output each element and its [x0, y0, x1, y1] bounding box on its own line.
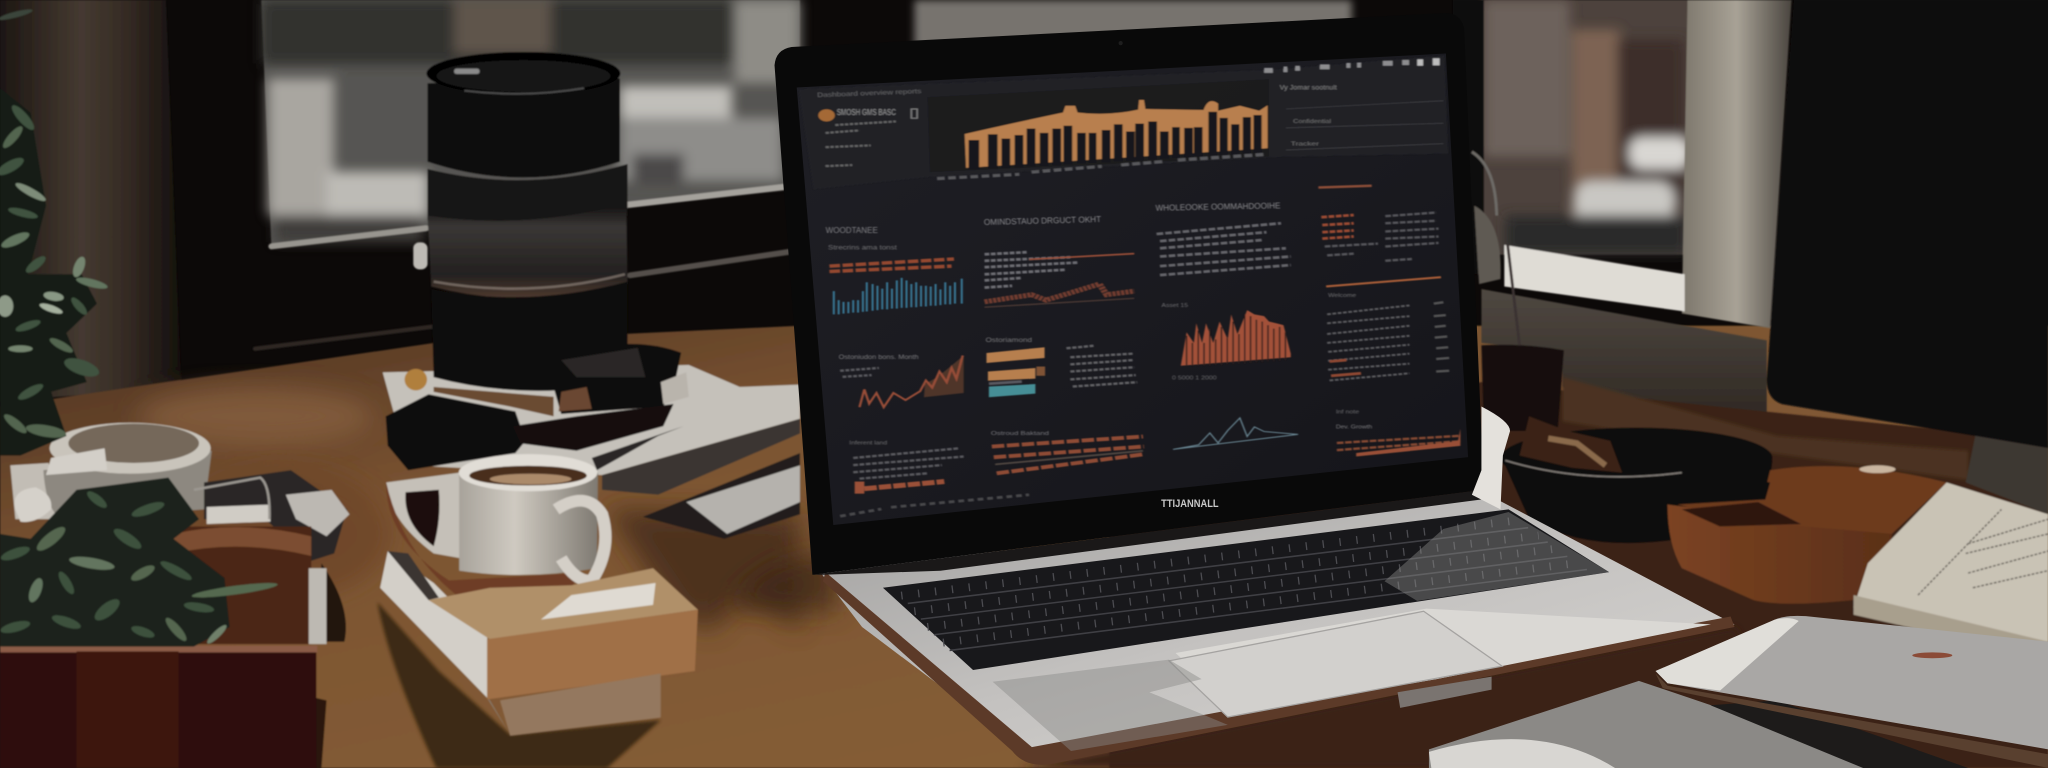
lower right chart: Inf note — [1336, 410, 1360, 415]
laptop brand logo: TTIJANNALL — [1161, 498, 1219, 510]
laptop shadow on the table — [1019, 627, 1750, 768]
lower right chart — [1336, 410, 1460, 457]
cast shadow under book stack — [378, 602, 661, 768]
section heading: left: WOODTANEE — [826, 226, 878, 235]
laptop base — [820, 494, 1735, 765]
right header panel text: Tracker — [1291, 142, 1320, 147]
section heading: right: WHOLEOOKE OOMMAHDOOIHE — [1155, 202, 1281, 213]
front edge — [823, 572, 1735, 765]
red column chart: 0 5000 1 2000 — [1172, 375, 1217, 381]
red column chart — [1161, 303, 1291, 381]
papers under grinder — [383, 365, 800, 539]
lower left text and bar: Inferent land — [849, 441, 888, 446]
lower centre table: Ostroud Baktand — [991, 431, 1050, 437]
top bar columns — [969, 112, 1262, 169]
coffee grinder — [413, 52, 628, 391]
screen — [797, 54, 1468, 525]
blue line chart — [834, 278, 962, 314]
lower centre table — [991, 431, 1144, 473]
shadow on base — [993, 660, 1228, 751]
foreground right items — [1429, 407, 2048, 768]
top orange area chart — [965, 100, 1268, 168]
lower line chart — [1173, 418, 1298, 449]
plant pot front — [0, 646, 317, 768]
header caption: Dashboard overview reports — [817, 87, 922, 99]
window sill highlights — [255, 187, 790, 349]
dark objects at grinder base — [386, 344, 689, 470]
coffee mug with tray — [386, 454, 605, 605]
black bowl — [1501, 416, 1772, 543]
monitor — [1767, 0, 2048, 448]
lower notebook — [1429, 681, 1968, 768]
tall plant — [0, 7, 109, 456]
bright sill — [1504, 245, 1685, 312]
chart axis labels — [937, 154, 1267, 179]
dashboard content — [799, 55, 1460, 516]
plant pot back — [173, 527, 327, 644]
open book — [1854, 482, 2048, 659]
crumpled wrapper — [194, 470, 349, 561]
lid inner bezel bottom — [812, 490, 1485, 575]
lid shell — [775, 13, 1484, 575]
right header panel text — [1280, 83, 1443, 150]
left window view — [261, 0, 800, 248]
window trim — [1682, 0, 1792, 328]
keyboard — [883, 509, 1609, 670]
top header panel — [799, 55, 1448, 189]
background: window above the laptop — [914, 0, 1352, 59]
webcam — [1119, 41, 1123, 45]
sunlit palm rest — [1176, 609, 1711, 712]
table surface — [0, 326, 2048, 768]
left panel orange text — [829, 259, 954, 271]
curtain — [0, 0, 181, 402]
orange area sparkline: Ostoniudon bons. Month — [839, 353, 919, 361]
red column chart: Asset 15 — [1161, 303, 1189, 309]
white cloth beside laptop — [1472, 407, 1510, 509]
top chart panel — [927, 79, 1269, 172]
left panel sub-heading: Strecrins ama tonst — [828, 243, 897, 251]
left cup — [10, 423, 212, 522]
section heading: centre: OMINDSTAUO DRGUCT OKHT — [984, 215, 1101, 228]
trackpad — [1169, 611, 1502, 717]
orange bar chart — [985, 336, 1137, 397]
right column text — [1318, 186, 1449, 380]
profile block: SMOSH GMS BASC — [837, 108, 896, 117]
table light and shadows — [138, 387, 837, 632]
centre panel text and orange trend — [985, 252, 1134, 307]
orange area sparkline — [839, 353, 964, 407]
lower left text and bar — [840, 441, 1029, 516]
monitor stand — [1966, 436, 2048, 514]
hinge notch — [1398, 677, 1492, 708]
dark window mullion — [1453, 0, 1484, 274]
background: right window, wall and monitor — [1109, 0, 2048, 768]
glass on sill — [1472, 152, 1564, 431]
right table — [1109, 382, 2048, 768]
right header panel text: Vy Jomar sootnult — [1280, 83, 1337, 91]
toolbar — [1264, 58, 1440, 73]
potted plant foliage — [0, 478, 278, 647]
white notebook — [1656, 616, 2048, 768]
orange bar chart: Ostoriamond — [985, 336, 1032, 344]
right window view — [1484, 0, 1691, 255]
wall under window — [1481, 289, 1767, 431]
laptop lid — [775, 13, 1485, 575]
right column text: Welcome — [1328, 294, 1357, 299]
terracotta tray — [1668, 465, 1947, 604]
right panel paragraph — [1157, 223, 1291, 275]
right header panel text: Confidential — [1293, 119, 1331, 125]
lower right chart: Dev. Growth — [1336, 425, 1372, 430]
stacked books — [380, 551, 698, 736]
profile block — [818, 108, 917, 166]
chassis — [820, 494, 1735, 755]
